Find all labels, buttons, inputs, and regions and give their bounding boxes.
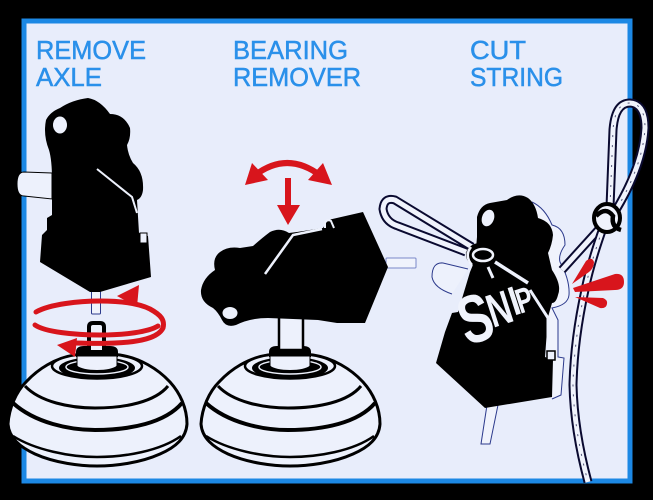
base: left dome xyxy=(8,346,187,466)
loop string left xyxy=(383,199,472,252)
SNIP label: S xyxy=(448,277,503,360)
clip xyxy=(547,351,555,360)
string strands down xyxy=(562,228,603,482)
pin xyxy=(386,258,416,268)
spring slit xyxy=(495,262,528,283)
knot xyxy=(466,243,494,267)
heading: remove axle: AXLE xyxy=(36,62,102,92)
axle outline xyxy=(432,263,468,294)
pin xyxy=(481,405,498,444)
pin xyxy=(92,290,100,314)
tool blue outline xyxy=(532,202,569,399)
base: middle dome xyxy=(201,346,380,466)
axle stub xyxy=(17,172,52,199)
heading: bearing remover: REMOVER xyxy=(233,62,361,92)
SNIP label xyxy=(448,277,538,360)
SNIP label: N xyxy=(480,280,519,338)
heading: remove axle: REMOVE xyxy=(36,35,146,65)
heading: bearing remover xyxy=(233,35,361,92)
red down arrow xyxy=(277,178,300,225)
spring slit xyxy=(97,169,137,213)
spring slit xyxy=(265,229,322,274)
clip xyxy=(140,233,147,243)
hole xyxy=(222,307,238,319)
hole xyxy=(53,116,67,134)
illustration: cut string xyxy=(383,103,645,482)
heading: cut string: CUT xyxy=(470,35,526,65)
SNIP label: I xyxy=(503,277,526,324)
illustration: remove axle xyxy=(8,98,187,466)
red double arrow xyxy=(254,163,321,176)
SNIP label: P xyxy=(511,280,538,322)
red snip marks xyxy=(572,259,624,308)
red rotation arrows xyxy=(35,301,163,343)
illustration: bearing remover xyxy=(201,163,416,466)
tool silhouette xyxy=(201,212,388,326)
heading: cut string xyxy=(470,35,563,92)
heading: cut string: STRING xyxy=(470,62,563,92)
clip xyxy=(325,220,334,228)
heading: bearing remover: BEARING xyxy=(233,35,348,65)
post xyxy=(89,323,104,350)
heading: remove axle xyxy=(36,35,146,92)
tool silhouette xyxy=(40,98,151,292)
tool silhouette xyxy=(436,195,559,408)
post xyxy=(279,316,303,350)
right knot xyxy=(594,204,621,232)
hole xyxy=(479,208,497,228)
string right loop xyxy=(610,103,645,210)
